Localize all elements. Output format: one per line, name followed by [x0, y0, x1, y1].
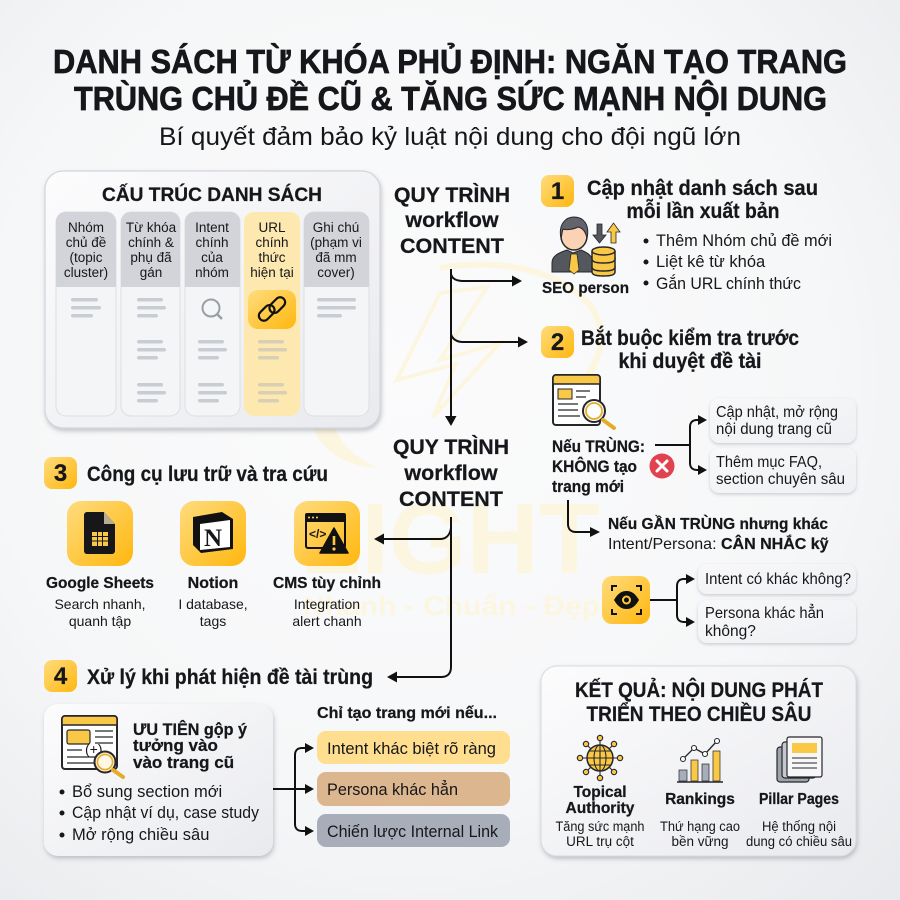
- column: notes: [304, 212, 369, 416]
- panel: list structure: [45, 171, 380, 428]
- tool: Google Sheets: Google Sheets: [46, 575, 154, 592]
- column: intent: của: [201, 250, 223, 265]
- icon: rankings chart: [677, 738, 723, 782]
- panel: result: dung có chiều sâu: [746, 834, 852, 849]
- panel: merge ideas: ƯU TIÊN gộp ý: [133, 720, 248, 739]
- tool: Notion: I database,: [178, 596, 248, 612]
- column: keywords: Từ khóa: [126, 220, 177, 235]
- column: topic cluster: cluster): [64, 265, 108, 280]
- tool: custom CMS: Integration: [294, 596, 360, 612]
- step 1 heading: mỗi lần xuất bản: [626, 199, 780, 223]
- icon: search: [202, 300, 222, 319]
- near-duplicate rule text: [608, 514, 829, 553]
- workflow label top: [394, 182, 510, 258]
- icon: link: [248, 290, 296, 329]
- panel: result: Topical: [573, 784, 627, 801]
- tool: Notion: tags: [200, 613, 226, 629]
- icon: page with magnifier: [553, 375, 614, 428]
- step 1 heading: [541, 175, 818, 223]
- column: topic cluster: Nhóm: [68, 220, 104, 235]
- column: official URL (highlighted): [244, 212, 300, 416]
- panel heading: CẤU TRÚC DANH SÁCH: [102, 182, 322, 206]
- column: notes: Ghi chú: [313, 220, 359, 235]
- arrows: workflow to sections 3 and 4: [374, 517, 451, 682]
- panel: result: TRIỂN THEO CHIỀU SÂU: [586, 702, 812, 726]
- icon: globe network: [577, 735, 623, 781]
- badge 4: [44, 660, 77, 692]
- panel: merge ideas: tưởng vào: [133, 736, 218, 755]
- option: add FAQ: [710, 448, 856, 493]
- column: topic cluster: chủ đề: [66, 235, 106, 250]
- panel: merge ideas: Mở rộng chiều sâu: [72, 826, 209, 844]
- condition: internal link: [317, 814, 510, 847]
- badge 3: [44, 457, 77, 489]
- icon: SEO person with database: [552, 217, 620, 276]
- icon: code window with warning: </>: [309, 527, 326, 541]
- column: intent: chính: [195, 235, 229, 250]
- column: notes: (phạm vi: [310, 235, 362, 250]
- duplicate rule text: [552, 437, 645, 496]
- subtitle: Bí quyết đảm bảo kỷ luật nội dung cho đội ngũ lớn: [159, 123, 741, 151]
- condition: persona: Persona khác hẳn: [327, 780, 458, 799]
- option: update old page: [710, 398, 856, 443]
- workflow label top: CONTENT: [400, 234, 504, 258]
- question: persona: không?: [705, 623, 756, 640]
- panel: result: Hệ thống nội: [762, 819, 836, 834]
- section 4 heading: Xử lý khi phát hiện đề tài trùng: [87, 666, 373, 689]
- arrow: to near-duplicate: [568, 500, 600, 537]
- tool: custom CMS: CMS tùy chỉnh: [273, 575, 381, 592]
- icon: page with magnifier: [62, 716, 123, 777]
- icon: red cross: [650, 454, 674, 478]
- workflow label bottom: [393, 434, 509, 511]
- badge 2: 2: [551, 329, 564, 356]
- panel: result: URL trụ cột: [566, 834, 634, 849]
- tool: Google Sheets: [46, 501, 154, 629]
- arrows: workflow branches to steps 1, 2 and down: [445, 269, 528, 426]
- condition: persona: [317, 772, 510, 806]
- panel: result: Thứ hạng cao: [660, 819, 740, 834]
- column: keywords: gán: [140, 265, 162, 280]
- condition: intent: Intent khác biệt rõ ràng: [327, 739, 496, 758]
- badge 2: [541, 326, 574, 358]
- arrows: merge to conditions: [273, 743, 314, 836]
- step 1 bullets: [644, 232, 832, 293]
- icon: eye scan: [602, 576, 650, 624]
- panel: result: [541, 666, 856, 856]
- column: intent: Intent: [195, 220, 229, 235]
- badge 1: 1: [551, 178, 564, 205]
- column: official URL (highlighted): hiện tại: [250, 265, 294, 280]
- panel: merge ideas: vào trang cũ: [133, 753, 234, 772]
- conditions heading: Chỉ tạo trang mới nếu...: [317, 705, 497, 722]
- near-duplicate rule text: Intent/Persona: CÂN NHẮC kỹ: [608, 534, 829, 553]
- column: official URL (highlighted): chính: [255, 235, 289, 250]
- column: topic cluster: [56, 212, 116, 416]
- panel: merge ideas: Cập nhật ví dụ, case study: [72, 804, 260, 822]
- column: intent: [185, 212, 240, 416]
- step 2 heading: [541, 326, 799, 373]
- column: intent: nhóm: [195, 265, 229, 280]
- condition: intent: [317, 731, 510, 764]
- watermark: lightning logo and brand: LIGHT: [300, 483, 600, 595]
- question: persona: [698, 600, 856, 643]
- tool: Google Sheets: quanh tập: [69, 613, 131, 629]
- tool: custom CMS: alert chanh: [292, 613, 362, 629]
- badge 4: 4: [54, 663, 68, 690]
- workflow label top: workflow: [404, 208, 499, 232]
- workflow label bottom: QUY TRÌNH: [393, 434, 509, 459]
- duplicate rule text: trang mới: [552, 478, 624, 496]
- panel: result: Rankings: [665, 791, 735, 808]
- arrows: duplicate options: [655, 415, 707, 475]
- section 3 heading: [44, 457, 328, 489]
- duplicate rule text: KHÔNG tạo: [552, 457, 637, 476]
- question: persona: Persona khác hẳn: [705, 604, 824, 622]
- tool: Notion: [178, 501, 248, 629]
- panel: result: Authority: [566, 800, 635, 817]
- column: official URL (highlighted): thức: [258, 250, 286, 265]
- badge 3: 3: [54, 460, 67, 487]
- SEO person label: SEO person: [542, 280, 629, 297]
- panel: result: bền vững: [671, 834, 729, 849]
- tool: Google Sheets: Search nhanh,: [54, 596, 146, 612]
- column: notes: cover): [317, 265, 355, 280]
- tool: custom CMS: [273, 501, 381, 629]
- column: keywords: phụ đã: [130, 250, 172, 265]
- icon: page with magnifier: (+): [85, 741, 102, 757]
- column: topic cluster: (topic: [69, 250, 103, 265]
- column: official URL (highlighted): URL: [258, 220, 286, 235]
- column: keywords: chính &: [128, 235, 174, 250]
- near-duplicate rule text: Nếu GẦN TRÙNG nhưng khác: [608, 514, 828, 533]
- workflow label bottom: CONTENT: [399, 487, 503, 511]
- panel: result: Tăng sức mạnh: [556, 819, 644, 834]
- column: keywords: [121, 212, 180, 416]
- option: update old page: Cập nhật, mở rộng: [716, 404, 838, 421]
- column: notes: đã mm: [315, 250, 357, 265]
- option: add FAQ: Thêm mục FAQ,: [716, 454, 822, 471]
- panel: result: Pillar Pages: [759, 791, 839, 808]
- option: add FAQ: section chuyên sâu: [716, 471, 845, 488]
- title: DANH SÁCH TỪ KHÓA PHỦ ĐỊNH: NGĂN TẠO TRANG: [53, 43, 847, 81]
- icon: pillar pages: [777, 737, 822, 782]
- title: TRÙNG CHỦ ĐỀ CŨ & TĂNG SỨC MẠNH NỘI DUNG: [74, 79, 827, 118]
- section 3 heading: Công cụ lưu trữ và tra cứu: [87, 463, 328, 486]
- section 4 heading: [44, 660, 373, 692]
- condition: internal link: Chiến lược Internal Link: [327, 822, 498, 841]
- panel: merge ideas: Bổ sung section mới: [72, 783, 222, 801]
- step 2 heading: Bắt buộc kiểm tra trước: [581, 326, 799, 350]
- panel: merge ideas: [44, 704, 273, 856]
- question: intent: [698, 564, 856, 594]
- step 1 bullets: Gắn URL chính thức: [656, 274, 801, 293]
- arrows: eye to questions: [650, 574, 695, 627]
- step 1 bullets: Liệt kê từ khóa: [656, 253, 766, 271]
- duplicate rule text: Nếu TRÙNG:: [552, 437, 645, 456]
- panel heading: KẾT QUẢ: NỘI DUNG PHÁT: [575, 678, 823, 702]
- question: intent: Intent có khác không?: [705, 571, 851, 588]
- watermark: lightning logo and brand: [300, 265, 601, 621]
- watermark: lightning logo and brand: Nhanh - Chuẩn - Đẹp: [303, 591, 600, 621]
- tool: Notion: Notion: [188, 575, 238, 592]
- workflow label top: QUY TRÌNH: [394, 182, 510, 207]
- step 1 bullets: Thêm Nhóm chủ đề mới: [656, 232, 832, 250]
- badge 1: [541, 175, 574, 207]
- icon: sheet document: [84, 512, 115, 554]
- icon: Notion cube: N: [204, 525, 222, 552]
- step 1 heading: Cập nhật danh sách sau: [587, 177, 818, 200]
- workflow label bottom: workflow: [403, 461, 498, 485]
- title: [53, 43, 847, 118]
- option: update old page: nội dung trang cũ: [716, 421, 832, 438]
- step 2 heading: khi duyệt đề tài: [618, 350, 762, 373]
